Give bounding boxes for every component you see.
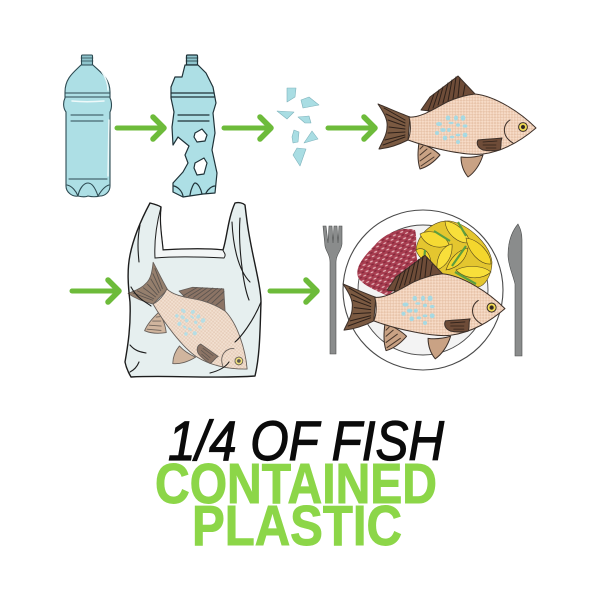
potato wedges: [416, 221, 492, 287]
icon: knife: [508, 224, 522, 356]
headline: plastic: PLASTIC: [192, 494, 402, 558]
plate with food and fish: [343, 210, 505, 370]
fish on plate: [343, 255, 505, 359]
icon: plastic bag with fish: [111, 203, 277, 402]
icon: fish with ingested plastic: [378, 76, 536, 177]
plate: [343, 210, 503, 370]
headline: 1/4 of fish: 1/4 OF FISH: [168, 409, 444, 472]
arrow 2: [224, 117, 271, 139]
arrow 4: [72, 280, 119, 302]
arrow 1: [117, 117, 164, 139]
red beans: [357, 229, 418, 296]
arrow 3: [328, 117, 375, 139]
arrow 5: [270, 280, 317, 302]
headline: contained: CONTAINED: [155, 452, 437, 516]
icon: degrading bottle: [171, 55, 217, 197]
icon: plastic fragments: [277, 88, 319, 166]
icon: fork: [323, 226, 342, 354]
icon: intact plastic bottle: [64, 55, 112, 197]
